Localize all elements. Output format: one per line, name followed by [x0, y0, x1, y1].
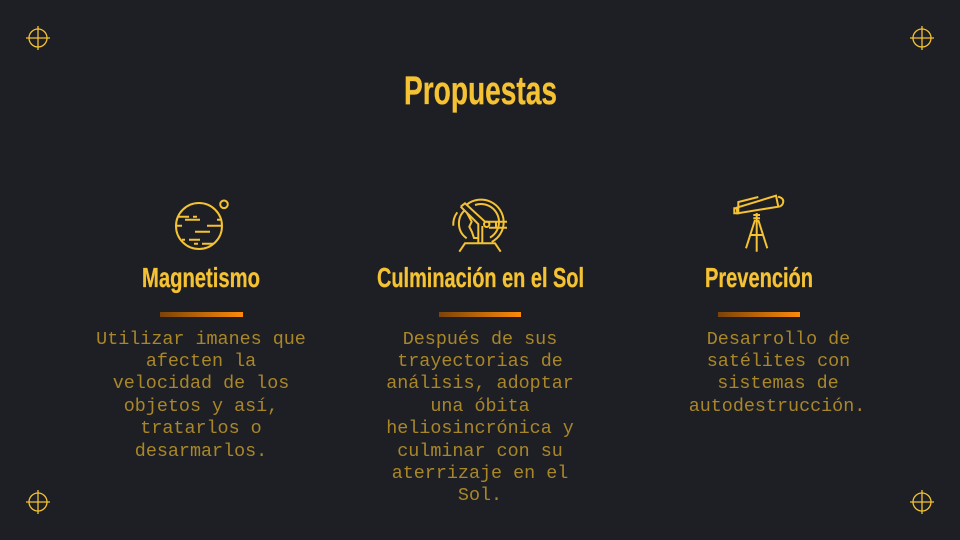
text block: Desarrollo de	[707, 329, 850, 350]
text block: Después de sus	[403, 329, 557, 350]
text block: culminar con su	[397, 441, 563, 462]
text block	[386, 329, 574, 506]
gradient bar	[439, 312, 521, 317]
heading: Culminación en el Sol: Culminación en el Sol	[377, 262, 584, 293]
text block: satélites con	[707, 351, 850, 372]
icon: planet	[176, 200, 228, 249]
gradient bar	[160, 312, 243, 317]
text block: autodestrucción.	[689, 396, 865, 417]
text block: análisis, adoptar	[386, 373, 574, 394]
crosshair: top left	[26, 26, 50, 50]
text block: sistemas de	[717, 373, 839, 394]
text block: afecten la	[146, 351, 256, 372]
icon: astronaut helmet	[453, 200, 507, 252]
panel: Magnetismo	[96, 200, 306, 462]
heading: Prevención: Prevención	[705, 262, 813, 293]
text block	[96, 329, 306, 462]
heading: Magnetismo: Magnetismo	[142, 262, 260, 293]
crosshair: top right	[910, 26, 934, 50]
text block: desarmarlos.	[135, 441, 267, 462]
crosshair: bottom right	[910, 490, 934, 514]
text block: objetos y así,	[124, 396, 278, 417]
panel: Culminación en el Sol	[377, 200, 584, 506]
text block: tratarlos o	[140, 418, 262, 439]
text block	[689, 329, 865, 417]
text block: trayectorias de	[397, 351, 563, 372]
gradient bar	[718, 312, 800, 317]
text block: una óbita	[430, 396, 530, 417]
text block: Utilizar imanes que	[96, 329, 306, 350]
title: Propuestas	[404, 69, 557, 113]
text block: aterrizaje en el	[392, 463, 568, 484]
text block: heliosincrónica y	[386, 418, 574, 439]
text block: Sol.	[458, 485, 502, 506]
crosshair: bottom left	[26, 490, 50, 514]
panel: Prevención	[689, 196, 865, 417]
icon: telescope	[734, 196, 783, 252]
text block: velocidad de los	[113, 373, 289, 394]
